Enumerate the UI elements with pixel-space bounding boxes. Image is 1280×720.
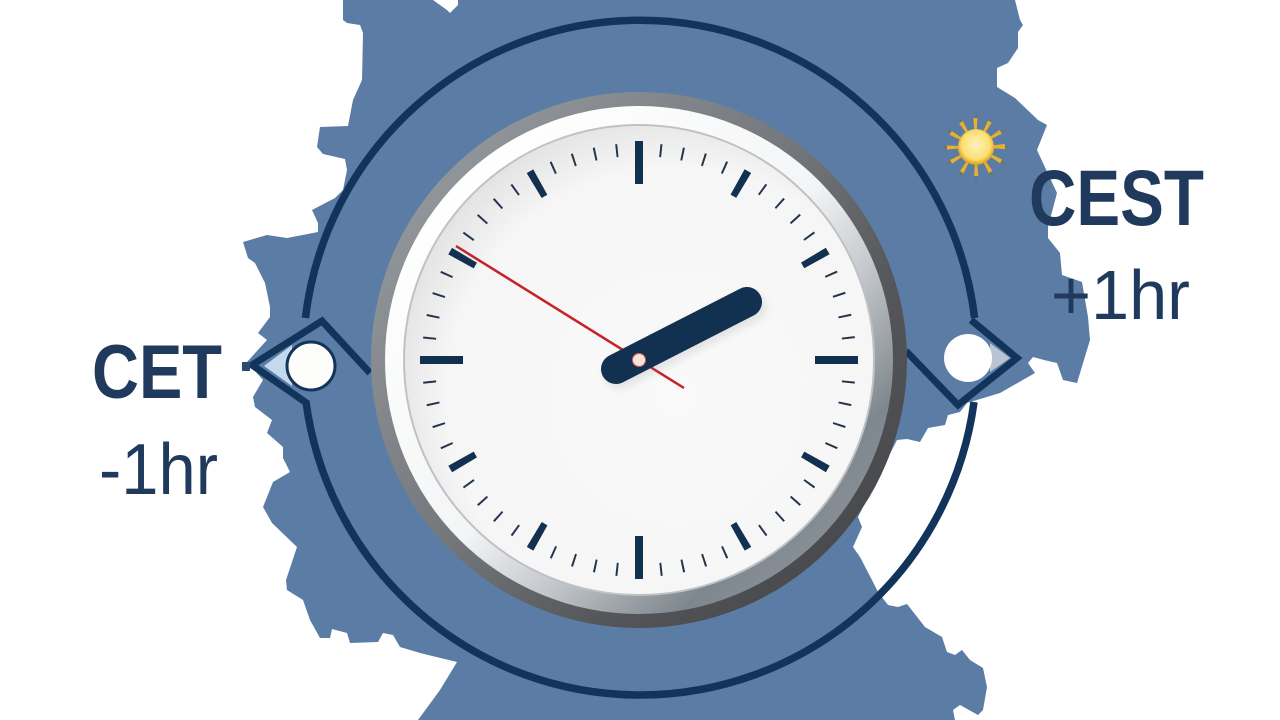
clock chrome ring	[385, 106, 893, 614]
left marker: CET diamond	[242, 321, 370, 404]
ring: upper arc	[305, 20, 975, 318]
label: -1hr: -1hr	[99, 430, 218, 510]
centre pin	[632, 354, 646, 366]
icon: sun	[945, 116, 1007, 178]
label: CEST: CEST	[1029, 153, 1204, 242]
hour hand	[616, 302, 747, 369]
label: CET: CET	[92, 330, 222, 415]
clock face	[404, 125, 874, 595]
hour hand shadow	[619, 307, 751, 374]
label: +1hr: +1hr	[1051, 256, 1190, 334]
hour ticks	[436, 156, 842, 564]
minute ticks	[428, 150, 850, 570]
second hand	[456, 246, 684, 388]
cardinal hour ticks	[420, 141, 858, 579]
right marker: CEST diamond	[906, 320, 1017, 405]
map of Germany	[243, 0, 1090, 720]
clock bezel	[371, 92, 907, 628]
ring: lower arc	[306, 402, 974, 695]
clock	[371, 92, 907, 628]
